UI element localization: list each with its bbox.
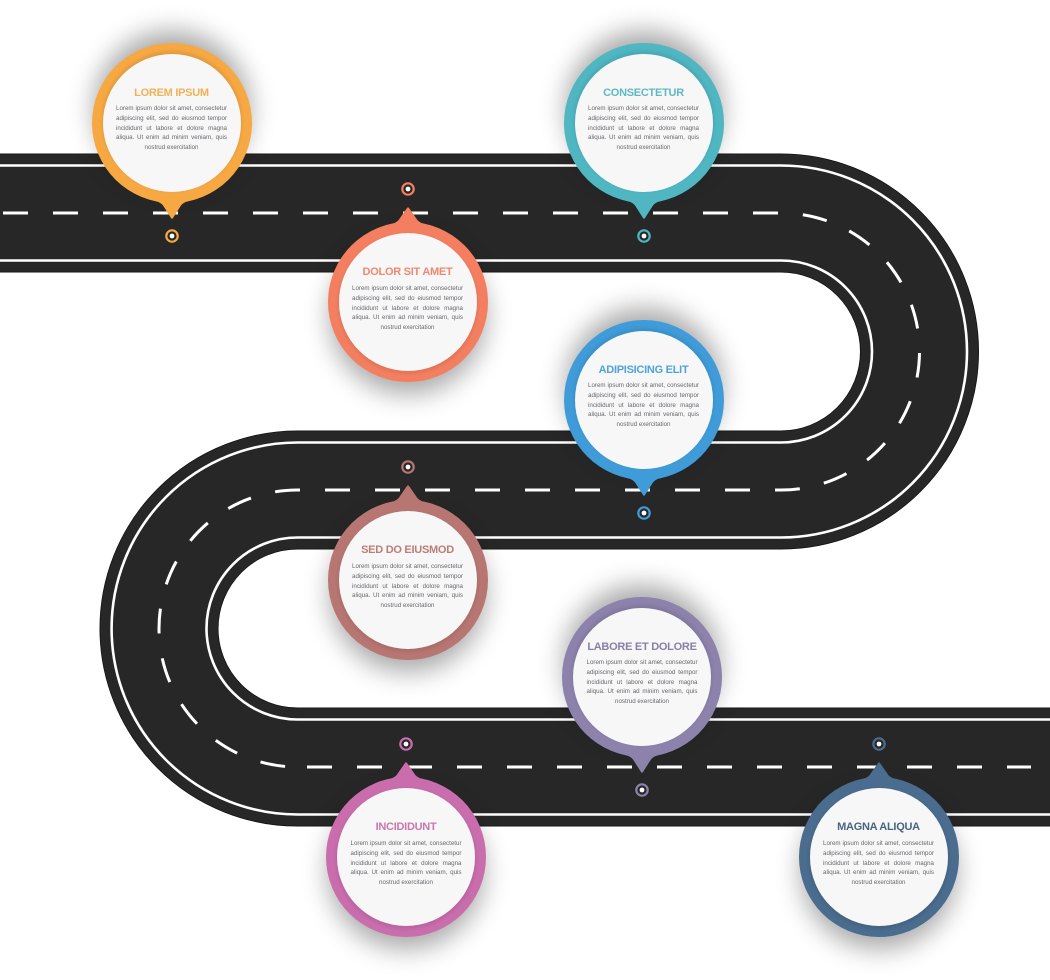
marker: adipisicing elit: incididunt ut labore et dolore magna (588, 402, 699, 409)
marker: magna aliqua: nostrud exercitation (852, 879, 906, 886)
marker: incididunt: Lorem ipsum dolor sit amet, consectetur (350, 840, 462, 847)
marker: lorem ipsum: aliqua. Ut enim ad minim veniam, quis (116, 134, 227, 141)
marker: sed do eiusmod: SED DO EIUSMOD (361, 544, 454, 556)
marker: magna aliqua: Lorem ipsum dolor sit amet, consectetur (823, 840, 934, 847)
marker: incididunt: INCIDIDUNT (376, 821, 436, 833)
marker: lorem ipsum: adipiscing elit, sed do eiusmod tempor (116, 115, 227, 122)
marker: consectetur: CONSECTETUR (603, 87, 684, 99)
marker: sed do eiusmod: aliqua. Ut enim ad minim veniam, quis (352, 592, 463, 599)
marker: sed do eiusmod: incididunt ut labore et dolore magna (352, 583, 463, 590)
marker: dolor sit amet (315, 182, 501, 409)
marker: labore et dolore: nostrud exercitation (615, 698, 669, 705)
marker: incididunt: incididunt ut labore et dolore magna (350, 860, 462, 867)
marker: dolor sit amet: aliqua. Ut enim ad minim veniam, quis (352, 314, 463, 321)
marker: lorem ipsum: LOREM IPSUM (134, 87, 209, 99)
marker: dolor sit amet: nostrud exercitation (380, 324, 434, 331)
marker: sed do eiusmod: Lorem ipsum dolor sit amet, consectetur (352, 563, 463, 570)
marker: sed do eiusmod (315, 460, 501, 687)
marker: incididunt: aliqua. Ut enim ad minim veniam, quis (350, 869, 462, 876)
marker: adipisicing elit: ADIPISICING ELIT (599, 364, 688, 376)
marker: magna aliqua: incididunt ut labore et dolore magna (823, 860, 934, 867)
marker: labore et dolore: Lorem ipsum dolor sit amet, consectetur (586, 659, 698, 666)
marker: magna aliqua: adipiscing elit, sed do eiusmod tempor (823, 850, 934, 857)
marker: incididunt: nostrud exercitation (379, 879, 433, 886)
marker: consectetur: aliqua. Ut enim ad minim veniam, quis (588, 134, 699, 141)
marker: labore et dolore: incididunt ut labore et dolore magna (586, 679, 698, 686)
marker: lorem ipsum: nostrud exercitation (144, 144, 198, 151)
marker: dolor sit amet: adipiscing elit, sed do eiusmod tempor (352, 295, 463, 302)
marker: consectetur (551, 16, 737, 243)
marker: adipisicing elit: adipiscing elit, sed do eiusmod tempor (588, 392, 699, 399)
marker: consectetur: adipiscing elit, sed do eiusmod tempor (588, 115, 699, 122)
marker: incididunt: adipiscing elit, sed do eiusmod tempor (350, 850, 462, 857)
marker: sed do eiusmod: adipiscing elit, sed do eiusmod tempor (352, 573, 463, 580)
marker: dolor sit amet: DOLOR SIT AMET (363, 266, 452, 278)
marker: adipisicing elit: Lorem ipsum dolor sit amet, consectetur (588, 382, 699, 389)
marker: labore et dolore: adipiscing elit, sed do eiusmod tempor (586, 669, 698, 676)
marker: incididunt (313, 737, 499, 964)
marker: consectetur: Lorem ipsum dolor sit amet, consectetur (588, 105, 699, 112)
marker: consectetur: incididunt ut labore et dolore magna (588, 125, 699, 132)
marker: dolor sit amet: Lorem ipsum dolor sit amet, consectetur (352, 285, 463, 292)
marker: lorem ipsum (79, 16, 265, 243)
marker: lorem ipsum: Lorem ipsum dolor sit amet, consectetur (116, 105, 227, 112)
marker: consectetur: nostrud exercitation (616, 144, 670, 151)
marker: magna aliqua (786, 737, 972, 964)
marker: lorem ipsum: incididunt ut labore et dolore magna (116, 125, 227, 132)
marker: labore et dolore (549, 570, 735, 797)
marker: sed do eiusmod: nostrud exercitation (380, 602, 434, 609)
marker: labore et dolore: aliqua. Ut enim ad minim veniam, quis (586, 688, 698, 695)
marker: adipisicing elit: aliqua. Ut enim ad minim veniam, quis (588, 411, 699, 418)
marker: labore et dolore: LABORE ET DOLORE (587, 641, 697, 653)
marker: dolor sit amet: incididunt ut labore et dolore magna (352, 305, 463, 312)
marker: adipisicing elit (551, 293, 737, 520)
marker: magna aliqua: aliqua. Ut enim ad minim veniam, quis (823, 869, 934, 876)
marker: magna aliqua: MAGNA ALIQUA (837, 821, 920, 833)
marker: adipisicing elit: nostrud exercitation (616, 421, 670, 428)
